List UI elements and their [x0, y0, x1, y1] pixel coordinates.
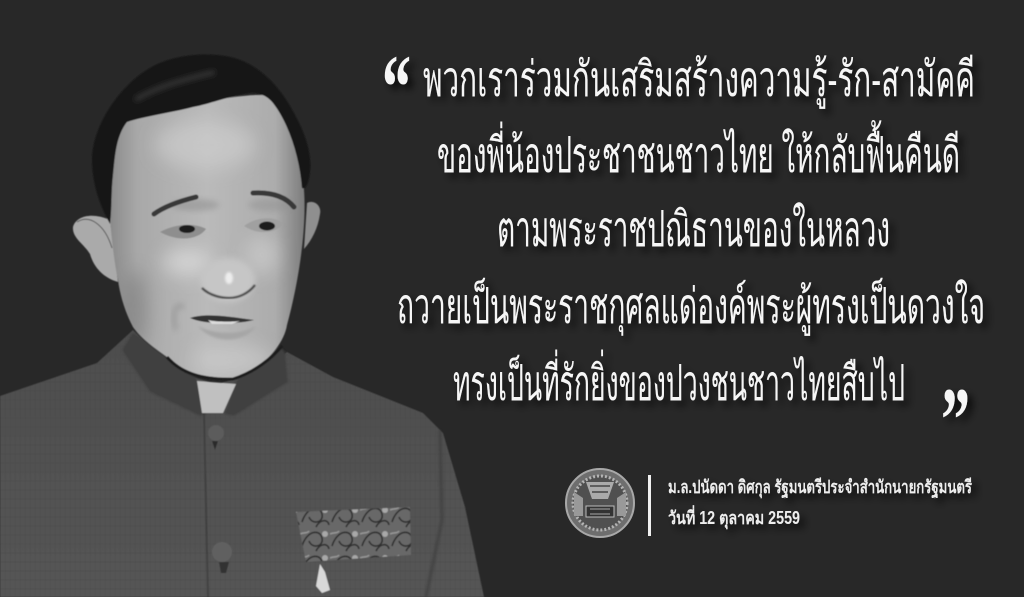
government seal [566, 469, 634, 537]
eyebrows [154, 193, 294, 214]
lapel pin [316, 564, 330, 593]
jacket [0, 330, 484, 597]
face [110, 95, 305, 380]
hair [92, 54, 310, 224]
face shading and highlights [123, 121, 292, 376]
hair sheen [135, 72, 215, 100]
ears [73, 202, 320, 282]
mouth [190, 315, 256, 340]
pocket square [296, 507, 411, 562]
quote text block [382, 36, 985, 471]
chin shadow [167, 346, 282, 379]
vertical divider [648, 475, 651, 536]
neck opening [197, 381, 236, 413]
date: วันที่ 12 ตุลาคม 2559 [668, 505, 800, 530]
eyes [160, 218, 284, 238]
attribution [668, 477, 972, 530]
portrait photo of the speaker [0, 54, 484, 597]
nose [201, 258, 255, 302]
jacket buttons [208, 425, 232, 573]
opening quotation mark: “ [382, 36, 411, 138]
closing quotation mark: ” [941, 369, 970, 471]
